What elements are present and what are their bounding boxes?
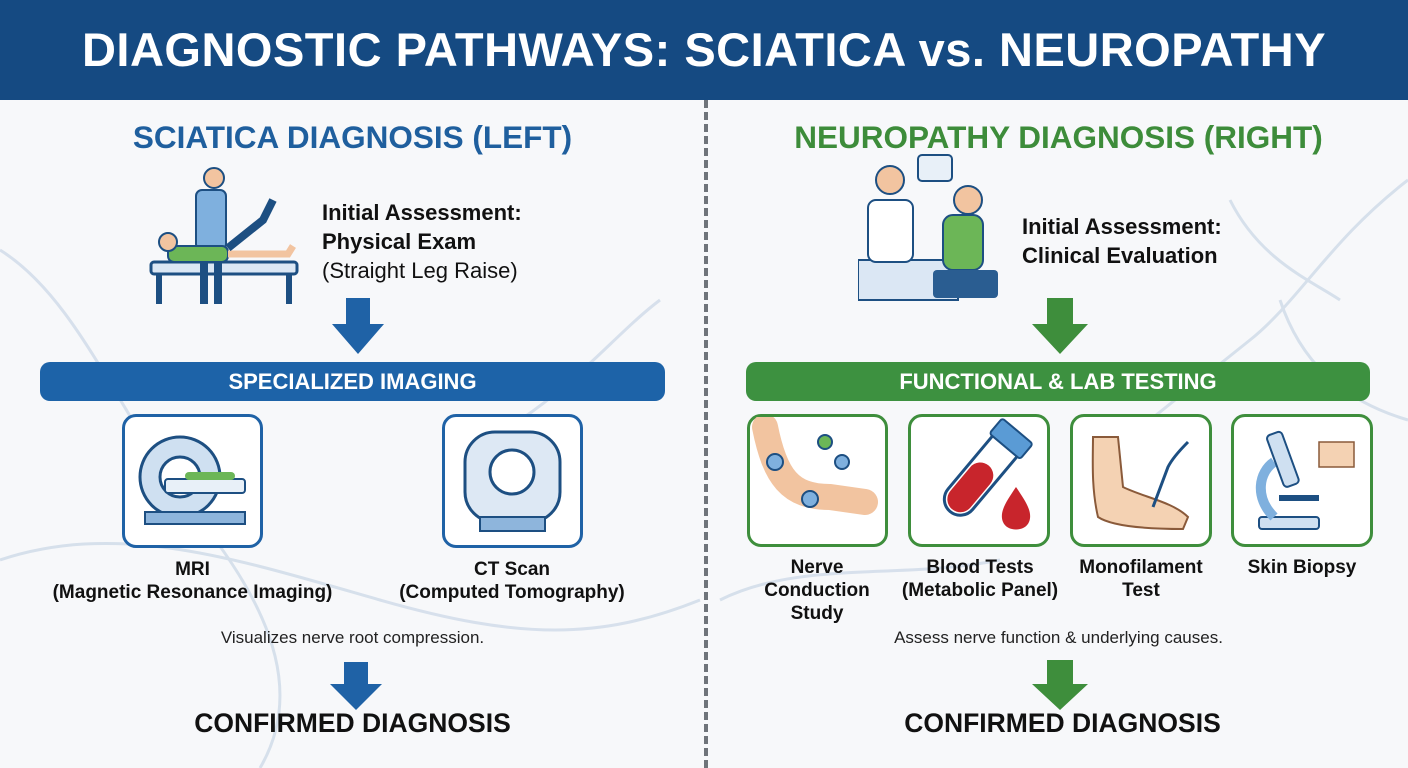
label blood (902, 557, 1058, 601)
title: DIAGNOSTIC PATHWAYS: SCIATICA vs. NEUROPATHY (82, 23, 1326, 76)
text: initial assessment left: Initial Assessment: (322, 200, 522, 225)
label nerve conduction (764, 557, 870, 624)
label skin biopsy: Skin Biopsy (1248, 557, 1356, 578)
text: initial assessment right: Initial Assessment: (1022, 214, 1222, 239)
text: initial assessment left (322, 200, 522, 283)
note left: Visualizes nerve root compression. (221, 628, 484, 647)
text: initial assessment right (1022, 214, 1222, 268)
label monofilament: Test (1122, 580, 1160, 601)
bar: functional & lab: FUNCTIONAL & LAB TESTING (899, 369, 1217, 394)
label MRI: (Magnetic Resonance Imaging) (53, 582, 332, 603)
icon: clinical evaluation (858, 154, 998, 301)
confirmed left: CONFIRMED DIAGNOSIS (194, 708, 511, 738)
left heading: SCIATICA DIAGNOSIS (LEFT) (133, 119, 572, 155)
label MRI: MRI (175, 559, 210, 580)
label nerve conduction: Nerve (791, 557, 843, 578)
label CT: (Computed Tomography) (399, 582, 625, 603)
label monofilament (1079, 557, 1203, 601)
label CT (399, 559, 625, 603)
header bar (0, 0, 1408, 100)
right heading: NEUROPATHY DIAGNOSIS (RIGHT) (794, 119, 1323, 155)
arrow right 2 (1032, 660, 1088, 710)
label blood: Blood Tests (926, 557, 1034, 578)
bar: functional & lab (746, 362, 1370, 401)
label CT: CT Scan (474, 559, 550, 580)
label nerve conduction: Study (791, 603, 843, 624)
confirmed right: CONFIRMED DIAGNOSIS (904, 708, 1221, 738)
note right: Assess nerve function & underlying causes. (894, 628, 1223, 647)
box: MRI (122, 414, 263, 548)
label MRI (53, 559, 332, 603)
text: initial assessment right: Clinical Evaluation (1022, 243, 1218, 268)
arrow right 1 (1032, 298, 1088, 354)
label blood: (Metabolic Panel) (902, 580, 1058, 601)
box: monofilament (1070, 414, 1212, 547)
text: initial assessment left: Physical Exam (322, 229, 476, 254)
bar: specialized imaging: SPECIALIZED IMAGING (228, 369, 477, 394)
icon: physical exam (150, 167, 298, 304)
box: blood (908, 414, 1050, 547)
box: CT (442, 414, 583, 548)
bar: specialized imaging (40, 362, 665, 401)
arrow left 2 (330, 662, 382, 710)
arrow left 1 (332, 298, 384, 354)
box: nerve conduction (747, 414, 888, 547)
label monofilament: Monofilament (1079, 557, 1203, 578)
label nerve conduction: Conduction (764, 580, 870, 601)
text: initial assessment left: (Straight Leg Raise) (322, 258, 518, 283)
box: skin biopsy (1231, 414, 1373, 547)
